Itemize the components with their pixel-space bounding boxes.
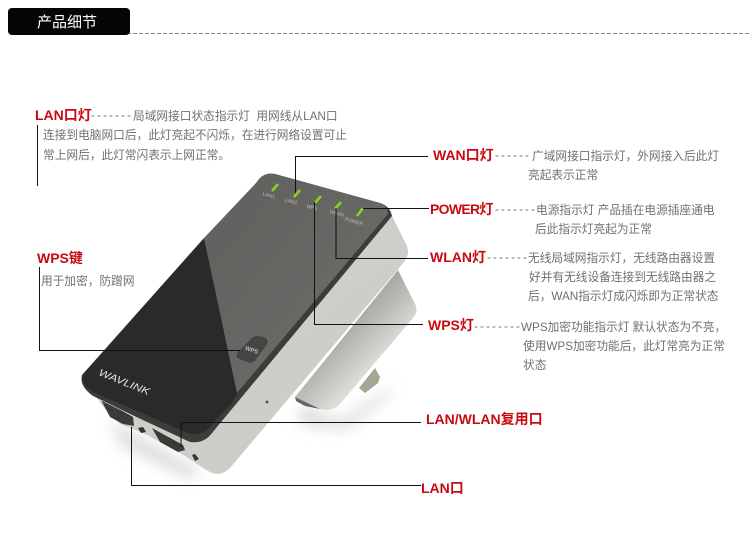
top face band xyxy=(81,174,392,442)
leader line: LAN port xyxy=(132,427,421,486)
black gloss face xyxy=(82,238,237,434)
WPS button xyxy=(236,336,268,363)
text block: WAN light: 亮起表示正常 xyxy=(528,169,598,182)
text block: WLAN light: 好并有无线设备连接到无线路由器之 xyxy=(529,271,716,284)
text block: POWER light: 电源指示灯 产品插在电源插座通电 xyxy=(536,204,715,217)
text block: POWER light: ------- xyxy=(495,203,537,216)
text block: WPS light: WPS加密功能指示灯 默认状态为不亮， xyxy=(521,321,726,334)
shadow under ports xyxy=(110,420,200,480)
indicator hole xyxy=(266,400,268,404)
leader line: LAN/WLAN port xyxy=(181,422,421,447)
text block: WLAN light: ------- xyxy=(487,251,529,264)
LED captions xyxy=(262,191,364,227)
plug pin xyxy=(359,368,380,393)
label: LAN port: LAN口 xyxy=(421,480,464,496)
LED captions: WLAN xyxy=(329,209,345,219)
text block: WPS key: 用于加密，防蹭网 xyxy=(41,275,135,288)
heading bar xyxy=(8,8,130,35)
LED captions: POWER xyxy=(344,217,364,227)
heading text: 产品细节 xyxy=(37,14,97,31)
text block: WLAN light: WLAN灯 xyxy=(430,249,486,265)
plug crease xyxy=(295,397,320,409)
leader line: POWER light xyxy=(363,208,429,210)
text block: WPS key: WPS键 xyxy=(37,250,83,266)
text block: POWER light: 后此指示灯亮起为正常 xyxy=(535,223,652,236)
text block: WAN light: 广域网接口指示灯，外网接入后此灯 xyxy=(532,150,719,163)
leader line: WAN light xyxy=(296,156,428,193)
text block: WAN light: ------ xyxy=(495,149,531,162)
text block: WPS light: WPS灯 xyxy=(428,317,474,333)
port: LAN/WLAN xyxy=(152,428,185,452)
plug body xyxy=(295,270,417,410)
leader line: WLAN light xyxy=(336,208,428,258)
gray face xyxy=(204,174,388,393)
text block: WPS light: -------- xyxy=(474,320,522,333)
text block: WPS light: 使用WPS加密功能后，此灯常亮为正常 xyxy=(523,340,725,353)
text block: WPS light: 状态 xyxy=(523,359,546,372)
text block: LAN light: LAN口灯 xyxy=(35,107,92,123)
text block: LAN light: 连接到电脑网口后，此灯亮起不闪烁，在进行网络设置可止 xyxy=(43,129,347,142)
text block: WLAN light: 无线局域网指示灯，无线路由器设置 xyxy=(528,252,715,265)
LED captions: LAN1 xyxy=(262,191,276,201)
text block: WAN light: WAN口灯 xyxy=(433,147,494,163)
LEDs xyxy=(272,184,363,216)
LED captions: LAN2 xyxy=(284,197,298,207)
text block: LAN light: 常上网后，此灯常闪表示上网正常。 xyxy=(43,149,230,162)
logo: WAVLINK xyxy=(97,368,153,399)
device body xyxy=(93,208,408,474)
leader line: WPS light xyxy=(314,202,423,324)
port: LAN small xyxy=(138,427,146,433)
text block: LAN light: ------- xyxy=(91,109,133,122)
shadow xyxy=(300,385,395,430)
LED captions: WPS xyxy=(305,204,319,213)
WPS button: WPS xyxy=(244,346,259,356)
label: LAN/WLAN port: LAN/WLAN复用口 xyxy=(426,411,543,427)
text block: WLAN light: 后，WAN指示灯成闪烁即为正常状态 xyxy=(528,290,718,303)
port: edge xyxy=(192,454,199,461)
port panel highlight xyxy=(95,396,137,418)
leader line: WPS key xyxy=(40,267,240,350)
port: LAN xyxy=(100,398,134,426)
text block: LAN light: 局域网接口状态指示灯 用网线从LAN口 xyxy=(133,110,338,123)
text block: POWER light: POWER灯 xyxy=(430,201,493,217)
device: wifi repeater xyxy=(81,174,417,480)
leader line: LAN light xyxy=(36,125,38,186)
